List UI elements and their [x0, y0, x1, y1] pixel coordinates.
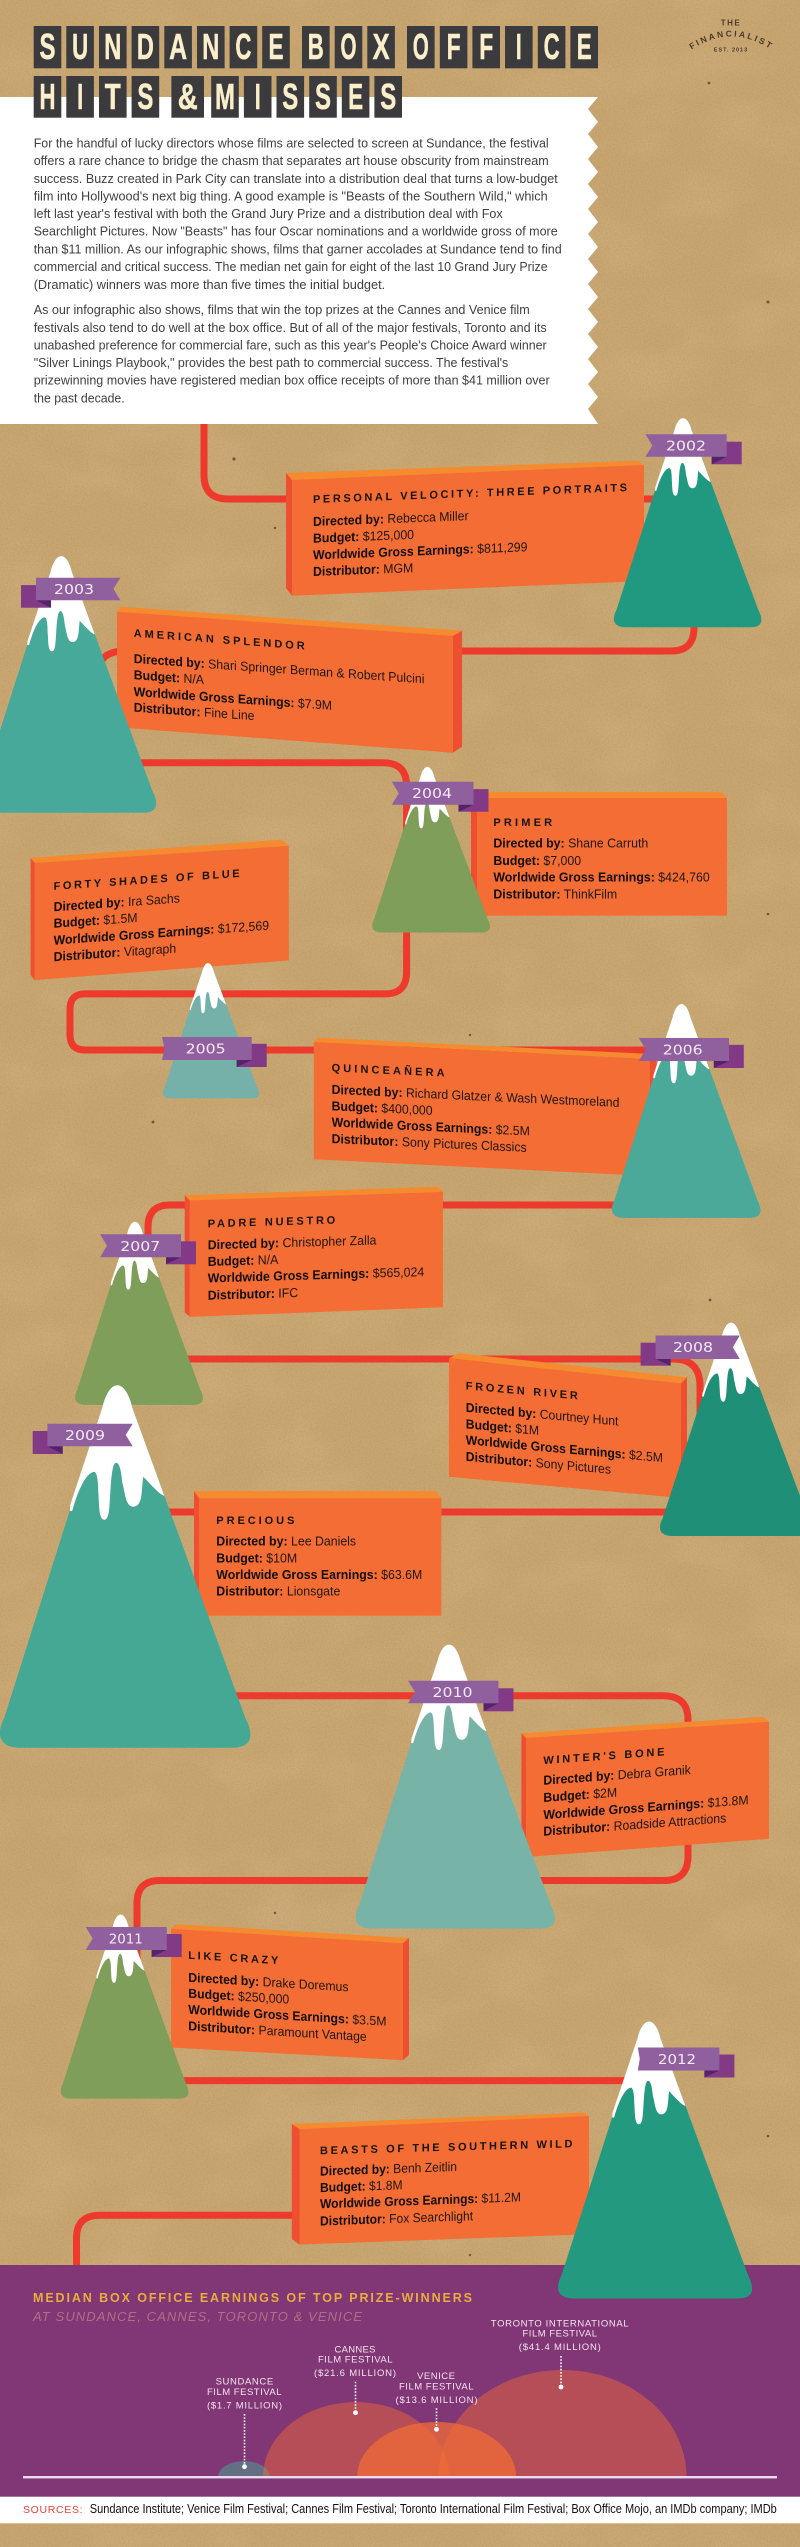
card: Padre Nuestro: PADRE NUESTRO: [208, 1215, 336, 1230]
label: Venice: VENICE: [417, 2371, 455, 2382]
label: Venice: ($13.6 MILLION): [396, 2395, 478, 2406]
card: Quinceañera: QUINCEAÑERA: [332, 1061, 445, 1079]
title: [34, 26, 598, 118]
card: American Splendor: Distributor: Fine Line: [134, 700, 254, 723]
label: Sundance: [207, 2377, 282, 2469]
label: Cannes: [314, 2344, 396, 2415]
card: Personal Velocity: [286, 461, 644, 596]
intro paragraph 1: Searchlight Pictures. Now "Beasts" has four Oscar nominations and a worldwide gross of more: [34, 224, 558, 239]
card: Primer: Budget: $7,000: [493, 854, 581, 868]
card: Padre Nuestro: Worldwide Gross Earnings: $565,024: [208, 1265, 424, 1286]
label: Sundance: SUNDANCE: [216, 2377, 273, 2388]
card: Beasts of the Southern Wild: Budget: $1.8M: [320, 2178, 403, 2195]
intro paragraph 1: offers a rare chance to bridge the chasm that separates art house obscurity from mainstream: [34, 153, 549, 168]
title: E: [348, 76, 363, 117]
intro paragraph 1: than $11 million. As our infographic shows, films that garner accolades at Sundance tend to find: [34, 242, 562, 257]
label: Toronto: ($41.4 MILLION): [519, 2342, 601, 2353]
label: Toronto: TORONTO INTERNATIONAL: [491, 2318, 629, 2329]
ribbon 2002: [645, 434, 742, 464]
card: Like Crazy: Budget: $250,000: [188, 1986, 289, 2007]
card: Personal Velocity: Directed by: Rebecca Miller: [313, 509, 469, 529]
card: Like Crazy: [171, 1924, 409, 2060]
red timeline path: [70, 420, 700, 2266]
card: Winter's Bone: Worldwide Gross Earnings: $13.8M: [543, 1793, 749, 1822]
title: S: [282, 76, 298, 117]
ribbon 2006: 2006: [663, 1042, 703, 1058]
mountain 2004: [372, 767, 490, 933]
mountain 2008: [660, 1322, 800, 1536]
card: Quinceañera: [314, 1038, 657, 1176]
mountain 2005: [163, 963, 259, 1098]
title: &: [178, 76, 198, 117]
ribbon 2009: [33, 1424, 133, 1454]
mountain 2007: [75, 1222, 203, 1405]
intro paragraph 2: "Silver Linings Playbook," provides the best path to commercial success. The festival's: [34, 355, 509, 370]
card: Quinceañera: Worldwide Gross Earnings: $2.5M: [332, 1115, 530, 1139]
intro paragraph 2: As our infographic also shows, films that win the top prizes at the Cannes and Venice film: [34, 302, 530, 317]
intro paragraph 2: unabashed preference for commercial fare, such as this year's People's Choice Award winner: [34, 338, 547, 353]
card: Primer: [471, 792, 727, 916]
label: Cannes: ($21.6 MILLION): [314, 2368, 396, 2379]
mountain 2012: [558, 2022, 752, 2298]
title: A: [169, 26, 187, 67]
card: Like Crazy: Worldwide Gross Earnings: $3.5M: [188, 2003, 386, 2029]
card: Forty Shades of Blue: Budget: $1.5M: [54, 911, 138, 931]
card: American Splendor: [117, 607, 462, 753]
mountain 2003: [0, 556, 156, 813]
festival semicircles: [218, 2370, 686, 2476]
title: I: [77, 76, 83, 117]
card: Padre Nuestro: Directed by: Christopher Zalla: [208, 1233, 377, 1252]
mountain 2010: [356, 1645, 555, 1928]
card: Frozen River: FROZEN RIVER: [466, 1380, 578, 1402]
ribbon 2004: 2004: [412, 786, 452, 802]
mountain 2011: [61, 1914, 188, 2099]
ribbon 2010: 2010: [432, 1685, 472, 1701]
ribbon 2012: 2012: [658, 2052, 696, 2068]
card: Like Crazy: Distributor: Paramount Vantage: [188, 2019, 367, 2044]
title: X: [373, 26, 390, 67]
sources strip: SOURCES:: [23, 2504, 83, 2516]
sources strip: [0, 2497, 800, 2523]
ribbon 2012: [638, 2048, 734, 2078]
ribbon 2009: 2009: [65, 1428, 105, 1444]
label: Toronto: [491, 2318, 629, 2389]
card: Primer: Directed by: Shane Carruth: [493, 836, 648, 851]
logo: The Financialist: FINANCIALIST: [689, 30, 772, 50]
label: Cannes: FILM FESTIVAL: [318, 2355, 392, 2366]
ribbon 2008: 2008: [673, 1340, 713, 1356]
card: Personal Velocity: Distributor: MGM: [313, 561, 413, 579]
ribbon 2010: [408, 1681, 514, 1711]
card: Padre Nuestro: Distributor: IFC: [208, 1286, 298, 1303]
title: E: [577, 26, 592, 67]
ribbon 2003: 2003: [54, 582, 94, 598]
title: U: [72, 26, 88, 67]
card: Primer: Distributor: ThinkFilm: [493, 887, 617, 901]
title: M: [215, 76, 235, 117]
card: American Splendor: AMERICAN SPLENDOR: [134, 628, 305, 653]
intro paragraph 1: left last year's festival with both the Grand Jury Prize and a distribution deal with Fox: [34, 206, 503, 221]
title: I: [255, 76, 261, 117]
card: Forty Shades of Blue: Worldwide Gross Earnings: $172,569: [54, 918, 269, 948]
card: Forty Shades of Blue: Distributor: Vitagraph: [54, 941, 176, 964]
card: Frozen River: Distributor: Sony Pictures: [466, 1449, 611, 1477]
intro paragraph 1: success. Buzz created in Park City can translate into a distribution deal that turns a low-budget: [34, 171, 558, 186]
ribbon 2006: [639, 1038, 744, 1068]
title: N: [202, 26, 219, 67]
title: C: [235, 26, 251, 67]
title: F: [447, 26, 461, 67]
card: Beasts of the Southern Wild: Directed by: Benh Zeitlin: [320, 2159, 457, 2179]
intro paragraph 1: film into Hollywood's next big thing. A good example is "Beasts of the Southern Wild," which: [34, 188, 548, 203]
intro paragraph 2: festivals also tend to do well at the box office. But of all of the major festivals, Toronto and its: [34, 320, 547, 335]
mountain 2006: [612, 1004, 760, 1218]
card: Padre Nuestro: [185, 1187, 443, 1317]
card: Precious: Worldwide Gross Earnings: $63.6M: [216, 1568, 422, 1582]
card: American Splendor: Worldwide Gross Earnings: $7.9M: [134, 685, 332, 713]
card: Beasts of the Southern Wild: [292, 2113, 589, 2244]
card: Precious: Distributor: Lionsgate: [216, 1584, 340, 1599]
title: F: [479, 26, 493, 67]
card: Forty Shades of Blue: [31, 840, 289, 980]
ribbon 2007: 2007: [120, 1239, 160, 1255]
title: E: [268, 26, 284, 67]
title: I: [516, 26, 522, 67]
intro paragraph 2: prizewinning movies have registered median box office receipts of more than $41 million over: [34, 373, 550, 388]
title: N: [104, 26, 121, 67]
label: Venice: FILM FESTIVAL: [399, 2382, 474, 2393]
card: Primer: PRIMER: [493, 817, 552, 829]
label: Toronto: FILM FESTIVAL: [522, 2329, 597, 2340]
label: Cannes: CANNES: [334, 2344, 376, 2355]
ribbon 2011: [86, 1927, 182, 1957]
intro panel: [0, 97, 598, 424]
title: O: [413, 26, 429, 67]
card: Beasts of the Southern Wild: Worldwide Gross Earnings: $11.2M: [320, 2190, 521, 2211]
logo: The Financialist: THE: [721, 19, 741, 28]
card: Personal Velocity: PERSONAL VELOCITY: THREE PORTRAITS: [313, 482, 627, 506]
ribbon 2005: 2005: [186, 1042, 226, 1058]
intro paragraph 2: the past decade.: [34, 390, 125, 405]
intro paragraph 1: commercial and critical success. The median net gain for eight of the last 10 Grand Jury Prize: [34, 259, 548, 274]
card: Forty Shades of Blue: FORTY SHADES OF BLUE: [54, 868, 240, 893]
card: Like Crazy: Directed by: Drake Doremus: [188, 1970, 349, 1994]
card: Frozen River: Directed by: Courtney Hunt: [466, 1400, 619, 1429]
card: Winter's Bone: Directed by: Debra Granik: [543, 1763, 691, 1788]
chart baseline: [23, 2476, 777, 2478]
title: O: [340, 26, 356, 67]
intro paragraph 1: For the handful of lucky directors whose films are selected to screen at Sundance, the festival: [34, 135, 549, 150]
card: Personal Velocity: Budget: $125,000: [313, 528, 414, 546]
label: Sundance: ($1.7 MILLION): [207, 2400, 282, 2411]
card: Winter's Bone: [521, 1717, 769, 1857]
card: Beasts of the Southern Wild: Distributor: Fox Searchlight: [320, 2209, 474, 2229]
card: Quinceañera: Directed by: Richard Glatzer & Wash Westmoreland: [332, 1082, 619, 1110]
card: Frozen River: [449, 1353, 687, 1498]
title: S: [380, 76, 396, 117]
card: Forty Shades of Blue: Directed by: Ira Sachs: [54, 891, 180, 914]
card: American Splendor: Directed by: Shari Springer Berman & Robert Pulcini: [134, 652, 424, 686]
intro paragraph 2: [34, 302, 550, 405]
title: S: [315, 76, 331, 117]
logo: The Financialist: [689, 19, 772, 54]
mountain 2009: [0, 1385, 250, 1748]
card: Like Crazy: LIKE CRAZY: [188, 1950, 279, 1967]
title: H: [40, 76, 56, 117]
card: Winter's Bone: Budget: $2M: [543, 1785, 617, 1805]
title: S: [137, 76, 153, 117]
card: Winter's Bone: Distributor: Roadside Attractions: [543, 1811, 726, 1839]
intro paragraph 1: [34, 135, 562, 292]
card: Padre Nuestro: Budget: N/A: [208, 1253, 279, 1269]
intro paragraph 1: (Dramatic) winners was more than five times the initial budget.: [34, 277, 385, 292]
card: Beasts of the Southern Wild: BEASTS OF THE SOUTHERN WILD: [320, 2138, 573, 2157]
mountain 2002: [614, 418, 761, 627]
chart panel: median box office earnings: [0, 2265, 800, 2497]
logo: The Financialist: EST. 2013: [714, 48, 748, 54]
card: Frozen River: Budget: $1M: [466, 1417, 539, 1438]
card: Primer: Worldwide Gross Earnings: $424,760: [493, 870, 710, 885]
card: Frozen River: Worldwide Gross Earnings: $2.5M: [466, 1433, 663, 1465]
chart heading: MEDIAN BOX OFFICE EARNINGS OF TOP PRIZE-WINNERS: [33, 2291, 472, 2305]
title: B: [308, 26, 324, 67]
title: D: [137, 26, 154, 67]
ribbon 2005: [162, 1037, 267, 1067]
ribbon 2003: [21, 578, 120, 608]
title: S: [40, 26, 56, 67]
label: Sundance: FILM FESTIVAL: [207, 2387, 282, 2398]
ribbon 2011: 2011: [109, 1932, 143, 1948]
ribbon 2008: [641, 1336, 740, 1366]
card: Precious: Directed by: Lee Daniels: [216, 1534, 356, 1549]
card: Quinceañera: Distributor: Sony Pictures Classics: [332, 1132, 527, 1155]
card: Precious: [194, 1491, 441, 1616]
title: T: [105, 76, 121, 117]
card: Quinceañera: Budget: $400,000: [332, 1099, 433, 1118]
ribbon 2007: [100, 1234, 196, 1264]
label: Venice: [396, 2371, 478, 2432]
card: Winter's Bone: WINTER'S BONE: [543, 1746, 664, 1767]
card: American Splendor: Budget: N/A: [134, 668, 205, 687]
ribbon 2004: [392, 782, 488, 812]
ribbon 2002: 2002: [666, 438, 706, 454]
card: Personal Velocity: Worldwide Gross Earnings: $811,299: [313, 540, 527, 562]
title: C: [544, 26, 560, 67]
card: Precious: Budget: $10M: [216, 1551, 297, 1565]
card: Precious: PRECIOUS: [216, 1515, 294, 1527]
chart subheading: AT SUNDANCE, CANNES, TORONTO & VENICE: [32, 2309, 362, 2324]
